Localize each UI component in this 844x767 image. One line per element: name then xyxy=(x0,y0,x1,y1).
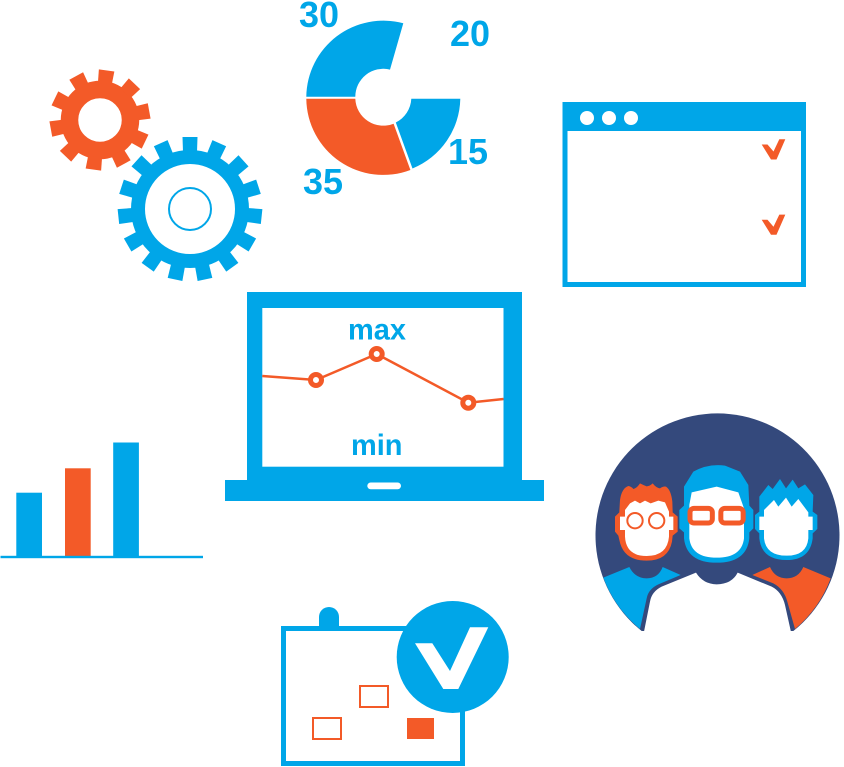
segment: 35 xyxy=(306,99,410,175)
bar 1 xyxy=(16,493,42,557)
right shoulder xyxy=(752,567,831,629)
laptop screen xyxy=(262,308,504,467)
calendar frame xyxy=(284,628,462,764)
calendar tab xyxy=(319,607,339,630)
label: max: max xyxy=(348,314,406,346)
left shoulder xyxy=(603,567,681,629)
window frame xyxy=(565,104,804,284)
center body xyxy=(643,573,792,635)
left person head xyxy=(615,483,678,561)
icon: check mark 2 xyxy=(762,215,785,235)
label: min: min xyxy=(351,429,402,462)
browser window xyxy=(563,102,806,284)
laptop xyxy=(225,292,544,501)
icon: orange gear xyxy=(49,69,151,171)
segment: 30 xyxy=(306,21,403,97)
laptop base xyxy=(225,480,544,501)
icon: blue gear xyxy=(118,137,262,281)
navy circle background xyxy=(595,413,839,631)
window buttons xyxy=(580,111,638,125)
segment: 15 xyxy=(396,99,460,168)
label: 15: 15 xyxy=(448,131,488,172)
team of people xyxy=(595,413,839,635)
icon: check mark 1 xyxy=(762,139,785,160)
label: 20: 20 xyxy=(450,13,490,54)
bar chart xyxy=(0,442,203,558)
title bar xyxy=(563,102,806,131)
calendar xyxy=(284,601,509,764)
center person head xyxy=(679,465,753,563)
event box filled xyxy=(407,718,434,739)
event box 1 xyxy=(360,686,388,707)
event box 2 xyxy=(313,718,341,739)
trackpad notch xyxy=(367,482,401,489)
line chart xyxy=(262,348,504,408)
check badge xyxy=(397,601,509,713)
laptop body xyxy=(247,292,522,487)
right person head xyxy=(755,479,817,560)
donut chart xyxy=(299,0,490,202)
bar 3 xyxy=(113,442,139,556)
gears xyxy=(49,69,262,281)
axis line xyxy=(0,556,203,558)
bar 2 xyxy=(65,468,91,556)
label: 35: 35 xyxy=(303,161,343,202)
